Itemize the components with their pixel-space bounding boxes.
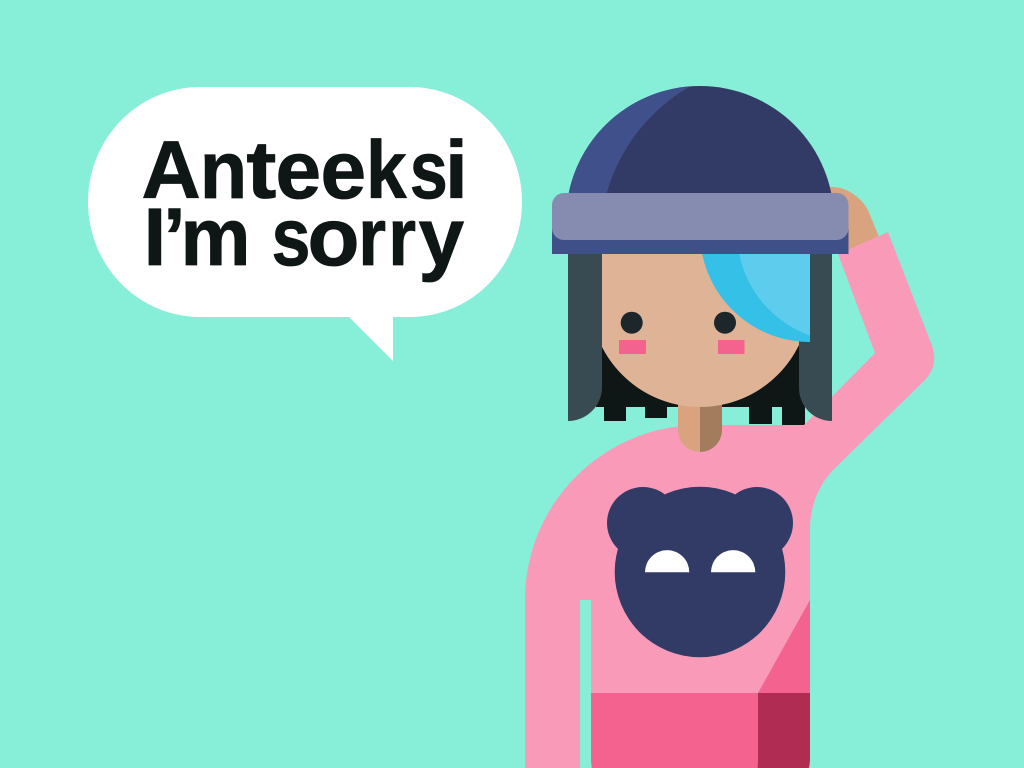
speech text: Anteeksi / I'm sorry: A [142,125,201,216]
illustration scene [88,86,934,768]
hand [826,187,881,250]
hat dome [566,86,834,220]
face [590,187,810,407]
character [525,86,957,768]
back hair [596,340,805,427]
speech text: Anteeksi / I'm sorry [142,125,468,283]
eyes [621,312,736,334]
left side hair [568,250,602,421]
sweater with raised arm [525,232,934,768]
speech text: Anteeksi / I'm sorry: t [246,125,276,216]
neck [678,400,722,452]
speech text: Anteeksi / I'm sorry: ’ [163,192,186,283]
speech text: Anteeksi / I'm sorry: m [180,192,250,283]
speech text: Anteeksi / I'm sorry: I [144,192,166,283]
speech text: Anteeksi / I'm sorry: i [445,125,468,216]
speech text: Anteeksi / I'm sorry: n [200,125,247,216]
speech text: Anteeksi / I'm sorry: k [366,125,407,216]
speech text: Anteeksi / I'm sorry: r [388,192,416,283]
right side hair [799,250,832,421]
bear eyes [645,550,755,572]
speech text: Anteeksi / I'm sorry: y [418,192,464,283]
speech text: Anteeksi / I'm sorry: e [276,125,321,216]
hat band [552,210,848,254]
pocket / hem [591,600,810,768]
speech text: Anteeksi / I'm sorry: s [272,192,310,283]
speech text: Anteeksi / I'm sorry: o [308,192,360,283]
speech text: Anteeksi / I'm sorry: r [358,192,386,283]
speech bubble [88,87,522,361]
hat [552,86,848,254]
bear graphic on sweater [607,487,793,657]
speech text: Anteeksi / I'm sorry: e [320,125,366,216]
speech text: Anteeksi / I'm sorry: s [410,125,448,216]
cheeks [619,340,744,354]
blue fringe [702,254,810,342]
